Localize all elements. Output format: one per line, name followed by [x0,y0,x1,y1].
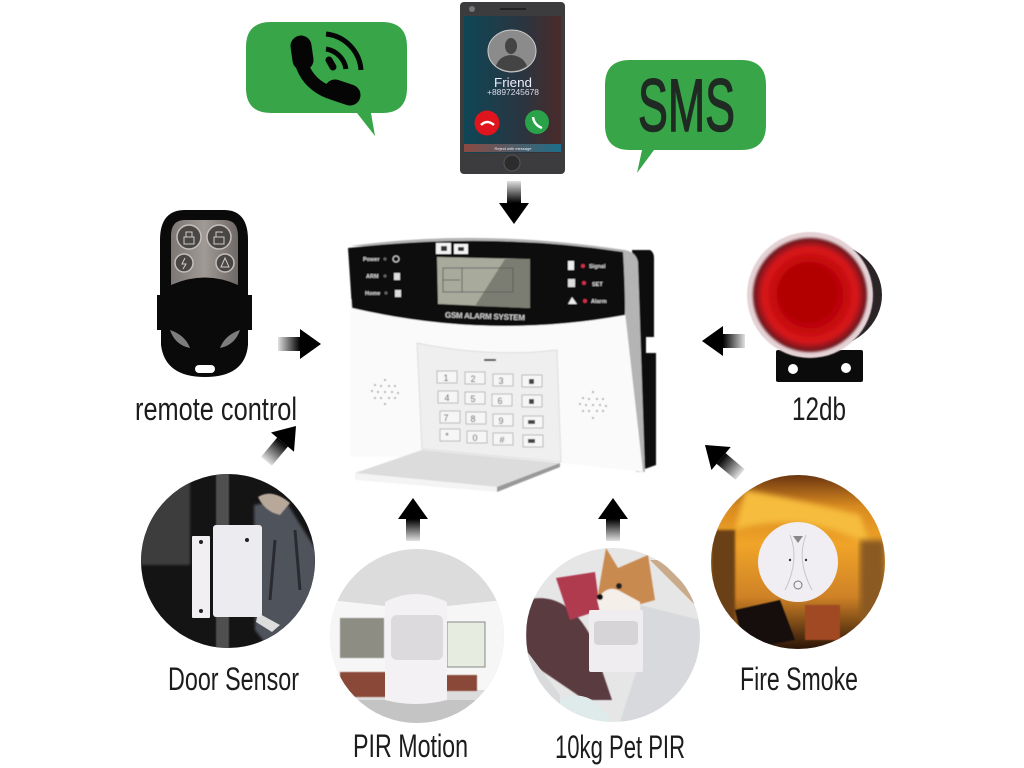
keypad keys [437,371,543,447]
keypad numbers: 7 [443,413,449,423]
caller number: +8897245678 [487,88,540,97]
right status labels [568,261,607,305]
keypad numbers: 8 [470,414,476,424]
right status labels: Signal [589,264,606,270]
arrow: siren to panel [702,326,745,356]
SMS speech bubble [605,60,766,173]
right speaker [579,391,607,419]
right status labels: Alarm [591,299,607,305]
arrow: pet PIR to panel [598,498,628,541]
keypad numbers: 5 [470,394,476,404]
keypad numbers: 0 [472,433,478,443]
keypad numbers: * [445,431,449,441]
keypad numbers [443,373,505,445]
label: 12db: 12db [792,391,846,427]
PIR device [385,594,447,704]
keypad numbers: # [499,435,505,445]
burglar [254,500,316,649]
door sensor device [192,525,262,618]
right status labels: SET [592,282,603,288]
keypad numbers: 1 [443,373,449,383]
arrow: door sensor to remote [255,416,307,471]
contact avatar [488,30,536,72]
pet PIR photo [526,548,700,722]
mode icons [436,243,468,254]
remote control [157,210,252,377]
open flap [355,450,560,492]
label: PIR motion: PIR Motion [353,728,468,764]
arrow: phone to panel [499,181,529,224]
alarm control panel [348,238,656,492]
black front panel [348,241,625,326]
keypad cover [417,343,561,462]
left status labels [363,256,401,297]
white body [350,300,643,472]
keypad numbers: 3 [498,376,504,386]
label: fire smoke: Fire Smoke [740,661,858,697]
smoke detector [758,522,838,602]
keypad numbers: 2 [470,374,476,384]
keypad icon keys [528,379,535,443]
left status labels: ARM [366,274,379,280]
arrow: remote to panel [278,329,321,359]
left status labels: Home [365,291,380,297]
remote button icons [182,232,229,269]
remote highlights [170,330,240,348]
label: remote control: remote control [135,391,297,427]
left status labels: Power [363,257,380,263]
dog [597,548,655,612]
phone screen [464,16,561,153]
decline button [474,110,500,136]
label: door sensor: Door Sensor [168,661,299,697]
call speech bubble [246,22,407,136]
left speaker [371,379,399,405]
fire smoke photo [711,475,885,649]
panel name: GSM ALARM SYSTEM [445,311,525,322]
PIR motion photo [330,549,504,723]
icon: phone handset [300,34,361,95]
silver trim [350,238,645,472]
siren [747,232,882,382]
back housing [632,250,656,470]
label: pet PIR: 10kg Pet PIR [555,729,685,765]
caller name: Friend [494,76,532,90]
accept button [525,110,549,134]
arrow: fire smoke to panel [695,434,750,486]
remote buttons [175,225,234,272]
siren red lens [753,238,867,352]
phone [460,2,565,174]
arrow: PIR motion to panel [398,498,428,541]
keypad numbers: 4 [444,393,450,403]
keypad numbers: 6 [497,396,503,406]
reject bar [464,144,561,152]
keypad numbers: 9 [498,416,504,426]
SMS text: SMS [638,64,735,147]
LCD screen [437,257,530,308]
reject bar: Reject with message [495,146,532,151]
door sensor photo [140,473,316,649]
metal button plate [171,220,238,285]
pet PIR device [589,610,643,672]
